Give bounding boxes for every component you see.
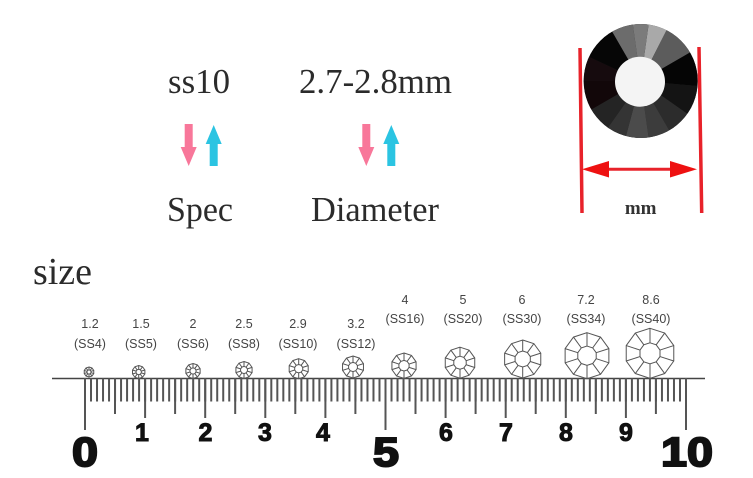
ruler numbers: 5: [373, 429, 399, 475]
arrow: spec pink down: [181, 124, 197, 166]
ruler numbers: 6: [439, 419, 453, 447]
stone SS34: [565, 293, 609, 379]
stone SS8: 2.5: [235, 317, 253, 331]
stone SS20: 5: [460, 293, 467, 307]
ruler numbers: 10: [661, 429, 713, 475]
stone SS6: [177, 317, 209, 378]
stone SS34: 7.2: [577, 293, 595, 307]
ruler numbers: 2: [199, 419, 212, 447]
stone SS30: [503, 293, 541, 378]
stone SS20: (SS20): [444, 312, 482, 326]
stone SS4: (SS4): [74, 337, 106, 351]
spec label: Spec: [167, 191, 233, 229]
arrow: diameter pink down: [358, 124, 374, 166]
stone SS16: (SS16): [386, 312, 424, 326]
ruler numbers: 7: [499, 419, 513, 447]
stone SS8: (SS8): [228, 337, 260, 351]
ruler numbers: 3: [258, 419, 272, 447]
stone SS4: 1.2: [81, 317, 99, 331]
stone SS40: (SS40): [632, 312, 670, 326]
ruler numbers: [72, 419, 713, 475]
mm label: mm: [625, 198, 657, 219]
spec value: ss10: [168, 63, 230, 101]
stone SS6: (SS6): [177, 337, 209, 351]
stone SS40: 8.6: [642, 293, 660, 307]
stone SS10: (SS10): [279, 337, 317, 351]
icon: black rhinestone with measurement: [584, 24, 698, 138]
stone SS34: (SS34): [567, 312, 605, 326]
arrow: diameter blue up: [383, 125, 399, 166]
stone SS16: 4: [402, 293, 409, 307]
stone SS4: [74, 317, 106, 377]
stone SS10: 2.9: [289, 317, 307, 331]
ruler numbers: 8: [559, 419, 573, 447]
stone SS10: [279, 317, 317, 379]
stone SS30: 6: [519, 293, 526, 307]
stone SS6: 2: [190, 317, 197, 331]
ruler: [52, 378, 705, 430]
stone SS12: (SS12): [337, 337, 375, 351]
stone SS12: 3.2: [347, 317, 365, 331]
stone SS12: [337, 317, 375, 378]
size heading: size: [33, 251, 92, 293]
diameter label: Diameter: [311, 191, 439, 229]
stone SS8: [228, 317, 260, 378]
stone SS5: [125, 317, 157, 378]
stone SS30: (SS30): [503, 312, 541, 326]
stone SS16: [386, 293, 424, 378]
stone SS40: [626, 293, 674, 378]
ruler numbers: 0: [72, 429, 98, 475]
stone SS20: [444, 293, 482, 378]
measurement guides and arrow: [580, 47, 702, 213]
arrow: spec blue up: [206, 125, 222, 166]
diameter value: 2.7-2.8mm: [299, 63, 452, 101]
ruler numbers: 4: [316, 419, 330, 447]
stone SS5: 1.5: [132, 317, 150, 331]
stone SS5: (SS5): [125, 337, 157, 351]
ruler numbers: 1: [135, 419, 149, 447]
ruler numbers: 9: [619, 419, 633, 447]
